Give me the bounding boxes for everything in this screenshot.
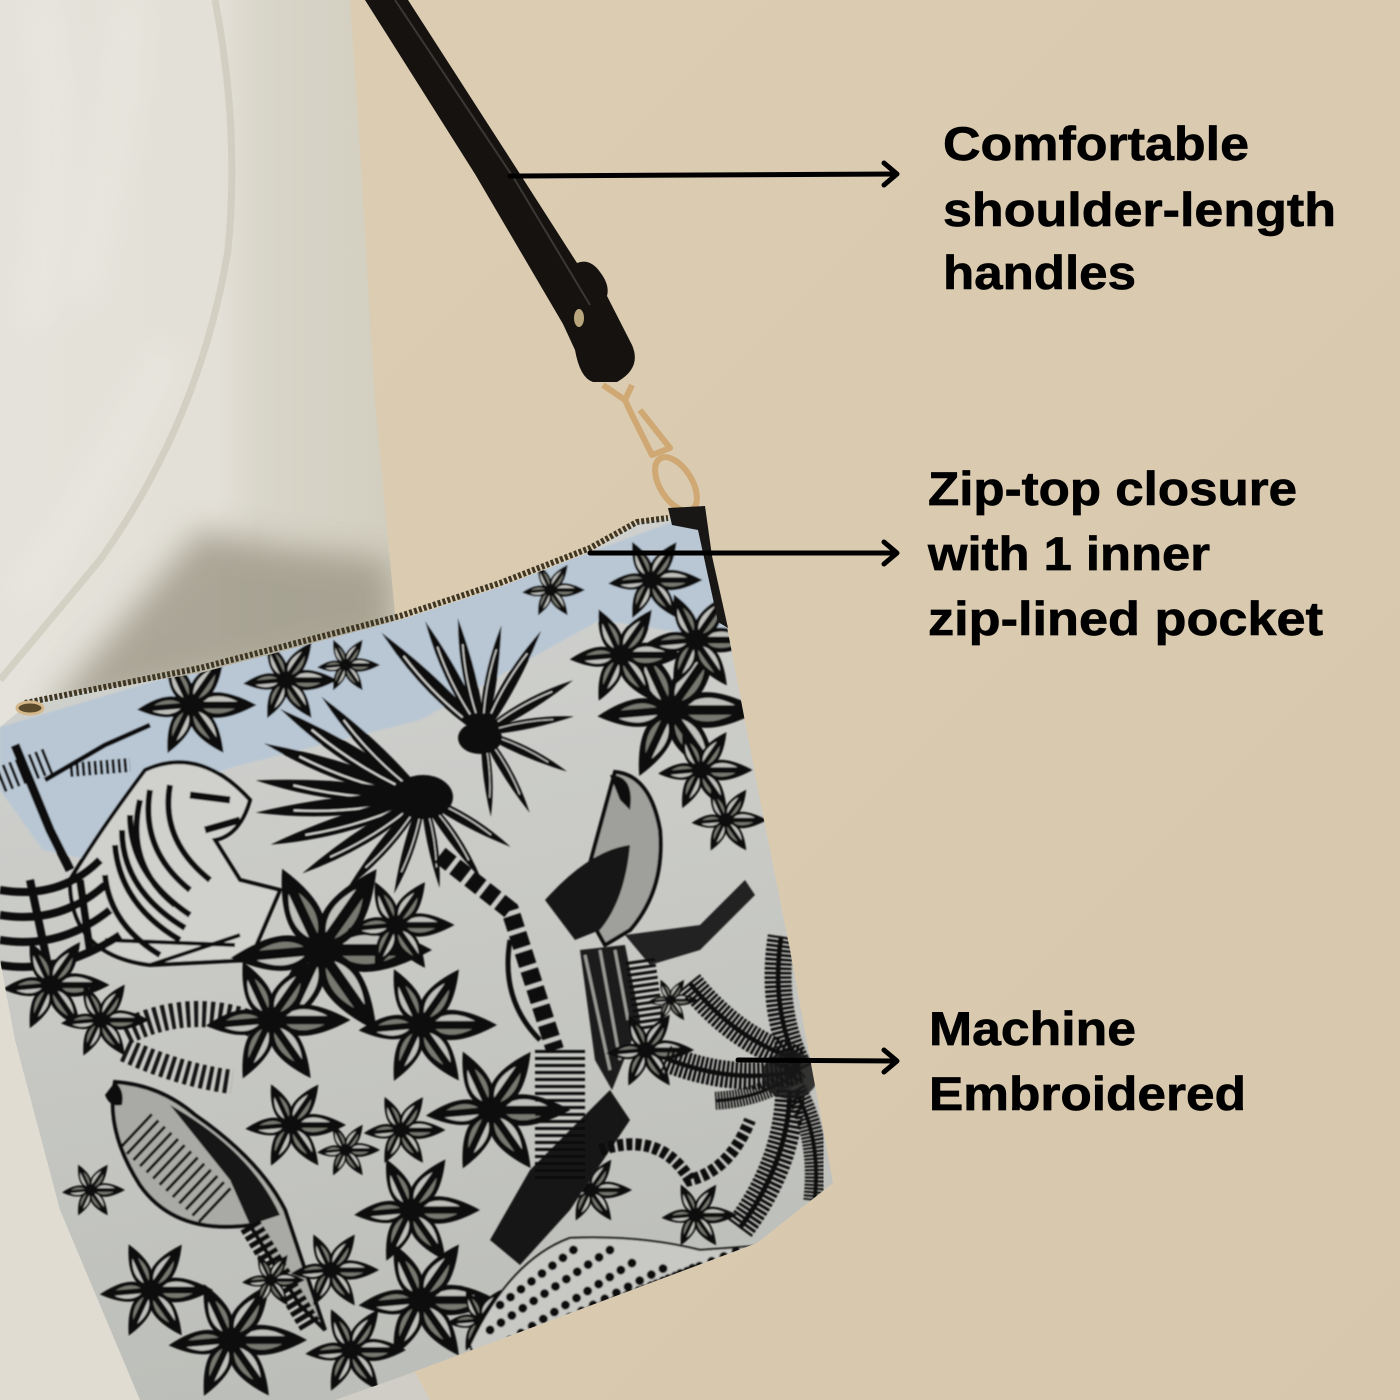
left parrot <box>105 1082 325 1330</box>
upper blue-grey sky patch <box>0 512 730 860</box>
callout: handles: shoulder-length <box>943 183 1336 236</box>
zip pull tab <box>668 506 728 628</box>
tiger <box>0 762 280 975</box>
callout: zip: zip-lined pocket <box>928 592 1323 645</box>
callout: embroidery: Machine <box>929 1002 1136 1055</box>
callout: zip: with 1 inner <box>927 527 1210 580</box>
callout: handles: handles <box>943 246 1136 299</box>
shoulder strap <box>365 0 635 382</box>
leopard <box>469 1236 754 1350</box>
shirt sleeve <box>0 0 430 1400</box>
foliage clusters <box>2 537 767 1400</box>
feathery palm fronds <box>665 936 823 1232</box>
arrow: embroidery <box>738 1050 897 1072</box>
callout: handles <box>943 117 1336 299</box>
zipper end pull <box>17 702 43 714</box>
bag with jungle embroidery <box>0 500 900 1400</box>
arrow: handles <box>510 163 897 185</box>
callout: embroidery <box>929 1002 1246 1120</box>
embroidered pattern <box>0 512 823 1400</box>
callout: zip: Zip-top closure <box>928 462 1297 515</box>
right parrot <box>545 772 755 1090</box>
arrow: zip <box>590 542 897 564</box>
striped oval leaves <box>125 1014 255 1082</box>
palm trees <box>255 617 575 1050</box>
central dark trunk <box>490 1050 750 1265</box>
gold clasp and ring <box>603 385 705 518</box>
zipper along bag top <box>25 518 668 703</box>
callout: handles: Comfortable <box>943 117 1249 170</box>
callout: embroidery: Embroidered <box>929 1067 1246 1120</box>
callout: zip <box>927 462 1323 645</box>
left branch <box>0 725 150 870</box>
